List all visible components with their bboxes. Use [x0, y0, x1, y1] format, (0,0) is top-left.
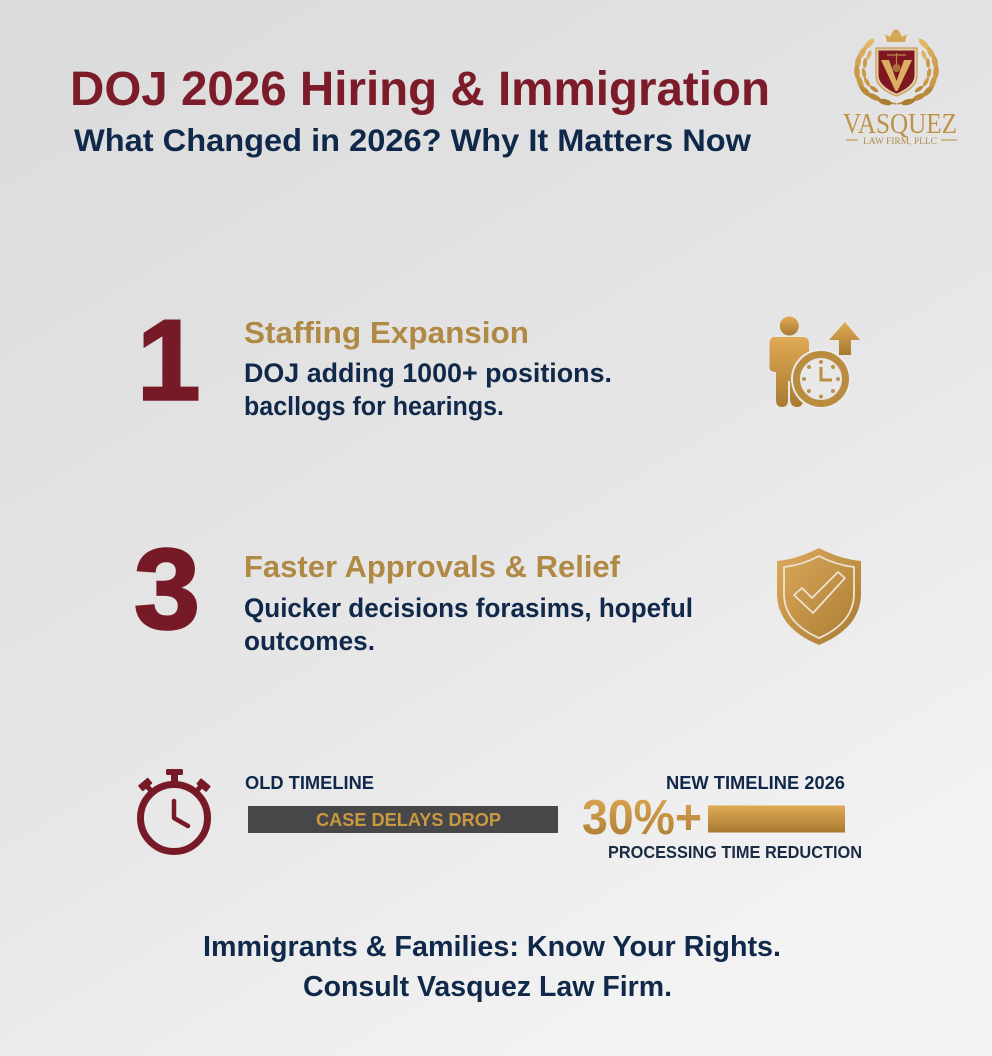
old timeline label: OLD TIMELINE [245, 772, 374, 793]
panel: faster approvals [134, 526, 861, 656]
icon: shield with check [777, 548, 861, 645]
icon: person, clock and up arrow [770, 316, 860, 409]
icon: laurel wreath [854, 37, 939, 107]
logo tagline: LAW FIRM, PLLC [863, 136, 937, 146]
logo: Vasquez Law Firm [843, 29, 957, 146]
body text [244, 358, 612, 421]
call to action [203, 931, 781, 1003]
number 1: 1 [137, 298, 200, 424]
title: DOJ 2026 Hiring & Immigration [70, 63, 770, 116]
stat: 30%+: 30%+ [582, 791, 702, 845]
new timeline bar [708, 806, 845, 832]
new timeline label: NEW TIMELINE 2026 [666, 772, 845, 793]
icon: crown [885, 29, 907, 42]
logo wordmark: VASQUEZ [843, 108, 957, 140]
subtitle: What Changed in 2026? Why It Matters Now [74, 122, 752, 158]
icon: stopwatch [138, 769, 211, 852]
body text [244, 593, 693, 656]
body text: Quicker decisions forasims, hopeful [244, 593, 693, 623]
heading: Faster Approvals & Relief [244, 550, 621, 584]
old timeline bar: CASE DELAYS DROP [316, 809, 501, 830]
stat caption: PROCESSING TIME REDUCTION [608, 842, 862, 862]
panel: staffing expansion [137, 298, 860, 424]
call to action: Consult Vasquez Law Firm. [303, 971, 672, 1003]
body text: outcomes. [244, 626, 375, 656]
panel: timeline comparison [138, 769, 862, 862]
number 3: 3 [134, 526, 200, 653]
body text: bacllogs for hearings. [244, 393, 504, 421]
call to action: Immigrants & Families: Know Your Rights. [203, 931, 781, 963]
body text: DOJ adding 1000+ positions. [244, 358, 612, 388]
icon: shield crest [876, 48, 917, 96]
heading: Staffing Expansion [244, 316, 529, 350]
old timeline bar [248, 806, 558, 833]
